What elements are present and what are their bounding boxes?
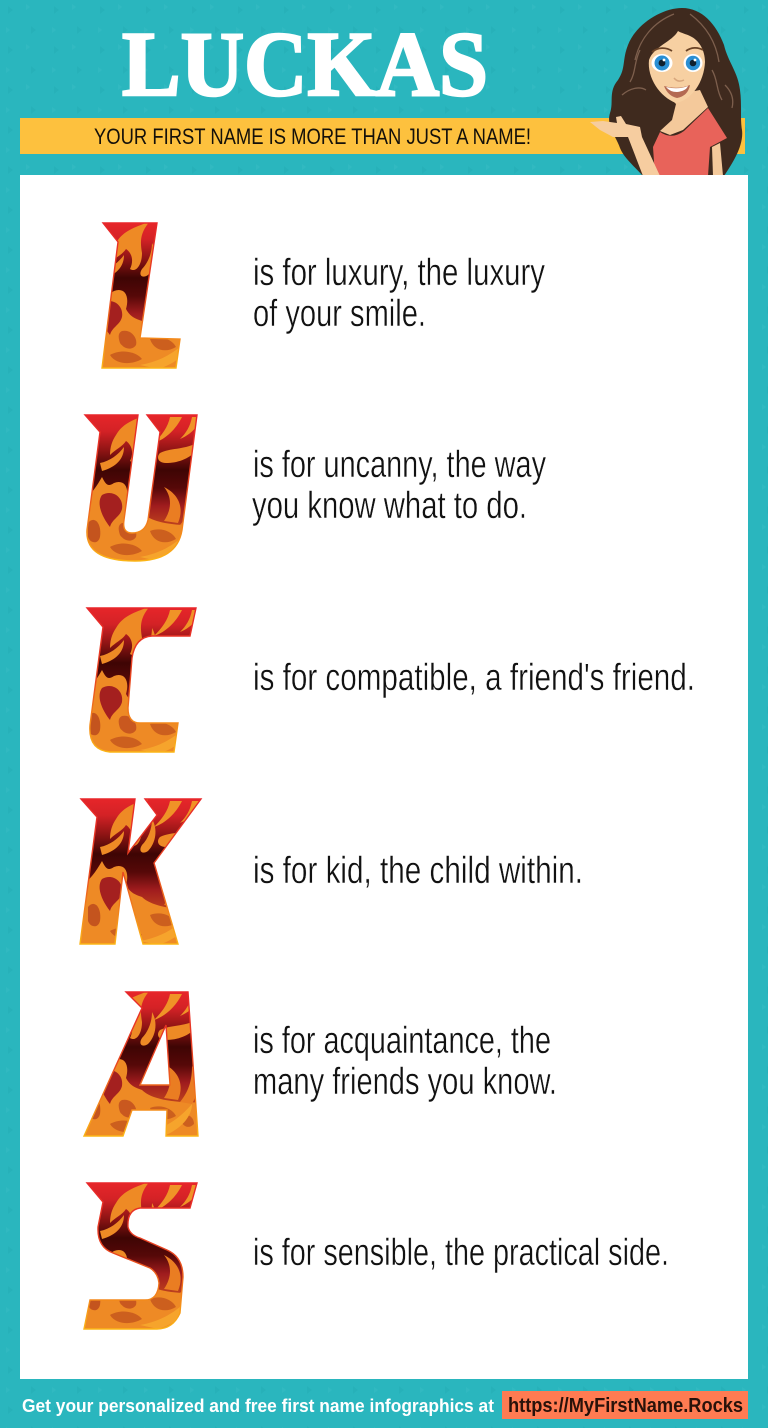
footer url badge: https://MyFirstName.Rocks <box>508 1395 743 1417</box>
flame letter K <box>79 798 202 945</box>
right eye <box>684 54 702 72</box>
row 2 text: you know what to do. <box>252 485 527 527</box>
smile <box>664 85 690 98</box>
row 5 text: is for acquaintance, the <box>253 1020 551 1062</box>
flame letter L <box>101 222 181 369</box>
subtitle banner: YOUR FIRST NAME IS MORE THAN JUST A NAME! <box>94 124 531 149</box>
illustration: cartoon woman <box>590 8 742 176</box>
flame letter A <box>83 991 199 1137</box>
row 1 text: is for luxury, the luxury <box>253 252 545 294</box>
face <box>649 31 705 103</box>
flame letter S <box>83 1182 198 1330</box>
shirt <box>653 108 727 176</box>
right arm <box>712 143 723 176</box>
row 1 text: of your smile. <box>253 293 426 335</box>
row 2 text: is for uncanny, the way <box>253 444 546 486</box>
title: LUCKAS <box>122 13 488 115</box>
row 5 text <box>253 1020 557 1103</box>
hair <box>609 8 742 176</box>
subtitle banner <box>20 118 745 154</box>
flame letter U <box>84 414 198 562</box>
row 1 text <box>253 252 545 335</box>
row 2 text <box>252 444 546 527</box>
neck and chest <box>660 90 708 135</box>
row 5 text: many friends you know. <box>253 1061 557 1103</box>
left arm and hand <box>590 116 660 176</box>
hair highlights <box>622 14 733 108</box>
white content panel <box>20 175 748 1379</box>
flame letter C <box>86 607 197 753</box>
eyebrows <box>652 48 703 52</box>
left eye <box>652 54 672 72</box>
nose <box>674 78 684 81</box>
footer call to action: Get your personalized and free first name infographics at <box>22 1396 494 1416</box>
row 4 text: is for kid, the child within. <box>253 850 583 892</box>
